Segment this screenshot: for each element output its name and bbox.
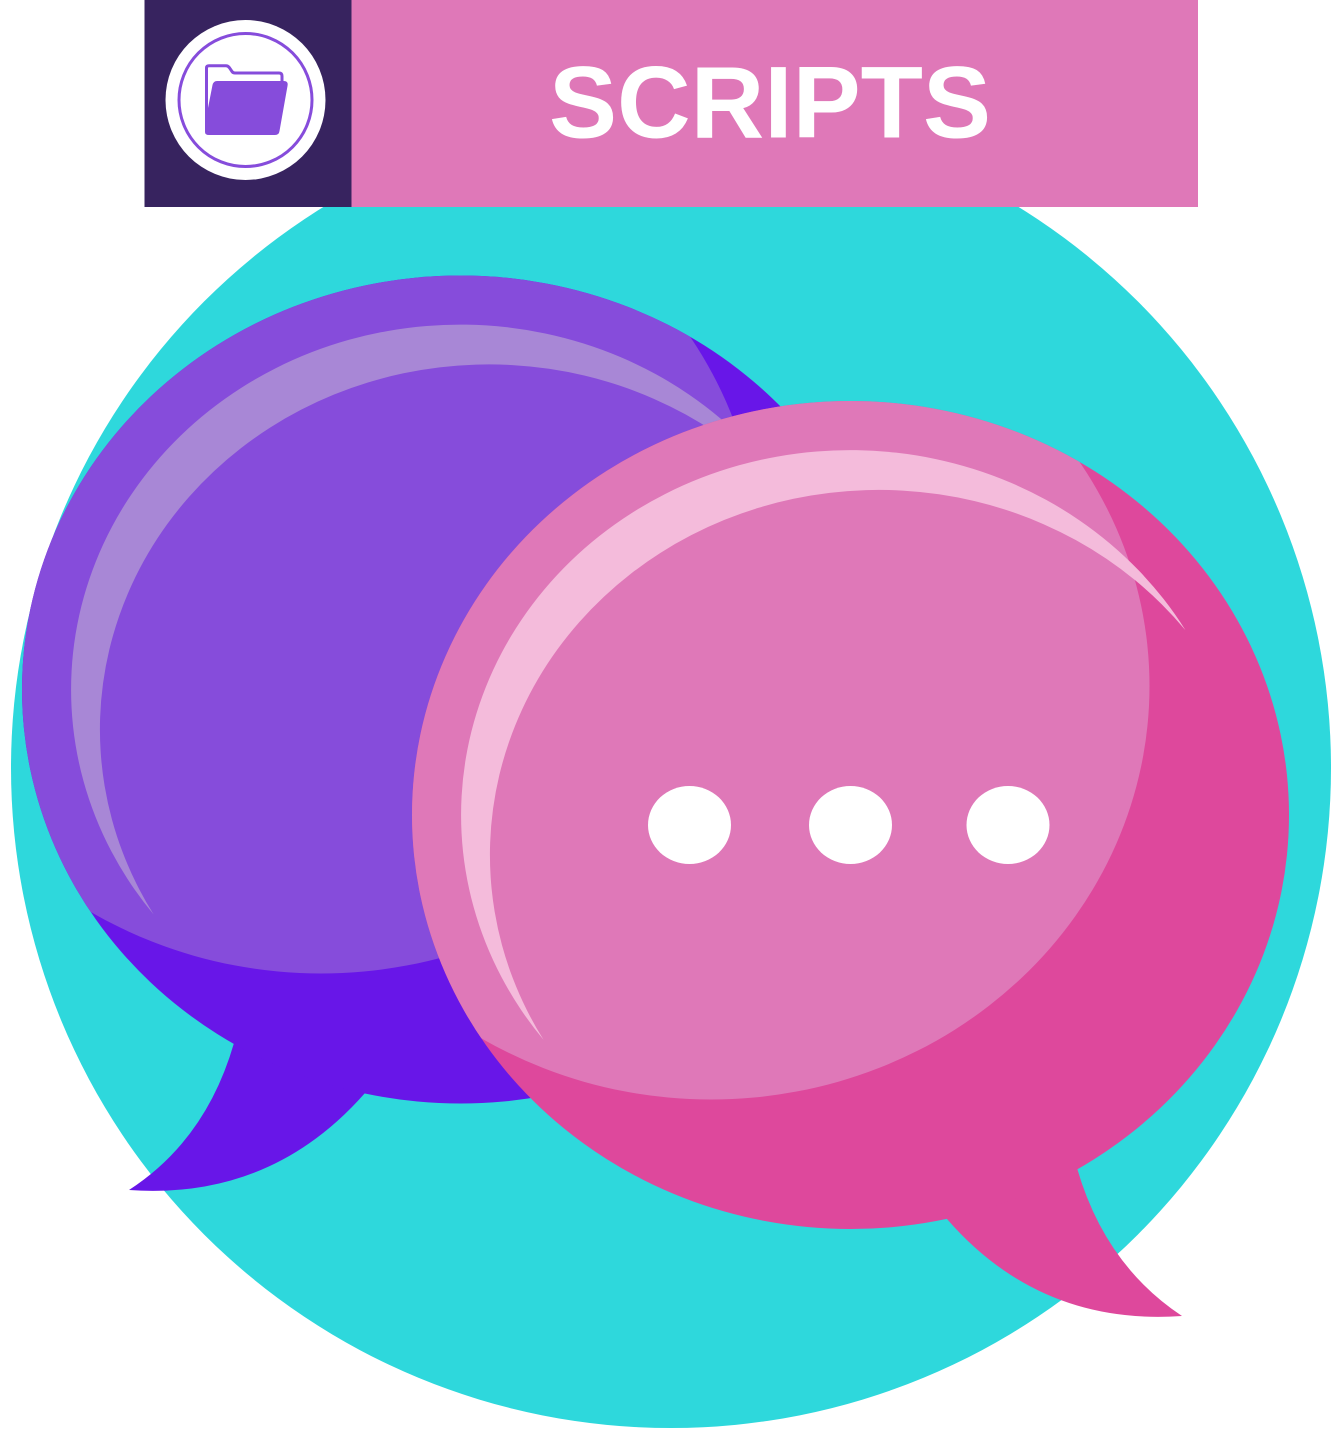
purple bubble tail — [129, 1000, 400, 1191]
icon: folder badge — [166, 20, 326, 180]
purple bubble body — [22, 276, 899, 1104]
icon: folder — [205, 66, 288, 135]
purple bubble lighter shade — [22, 276, 732, 974]
pink bubble body — [412, 401, 1289, 1229]
purple bubble highlight — [71, 325, 795, 914]
title: SCRIPTS — [549, 46, 991, 160]
header banner — [144, 0, 1198, 207]
icon panel — [144, 0, 352, 207]
purple speech bubble — [22, 276, 780, 1191]
pink bubble tail — [910, 1120, 1182, 1317]
pink speech bubble — [412, 401, 1289, 1317]
title panel — [352, 0, 1198, 207]
ellipsis dots — [648, 786, 1050, 864]
pink bubble highlight — [461, 450, 1185, 1040]
pink bubble lighter shade — [412, 401, 1150, 1100]
